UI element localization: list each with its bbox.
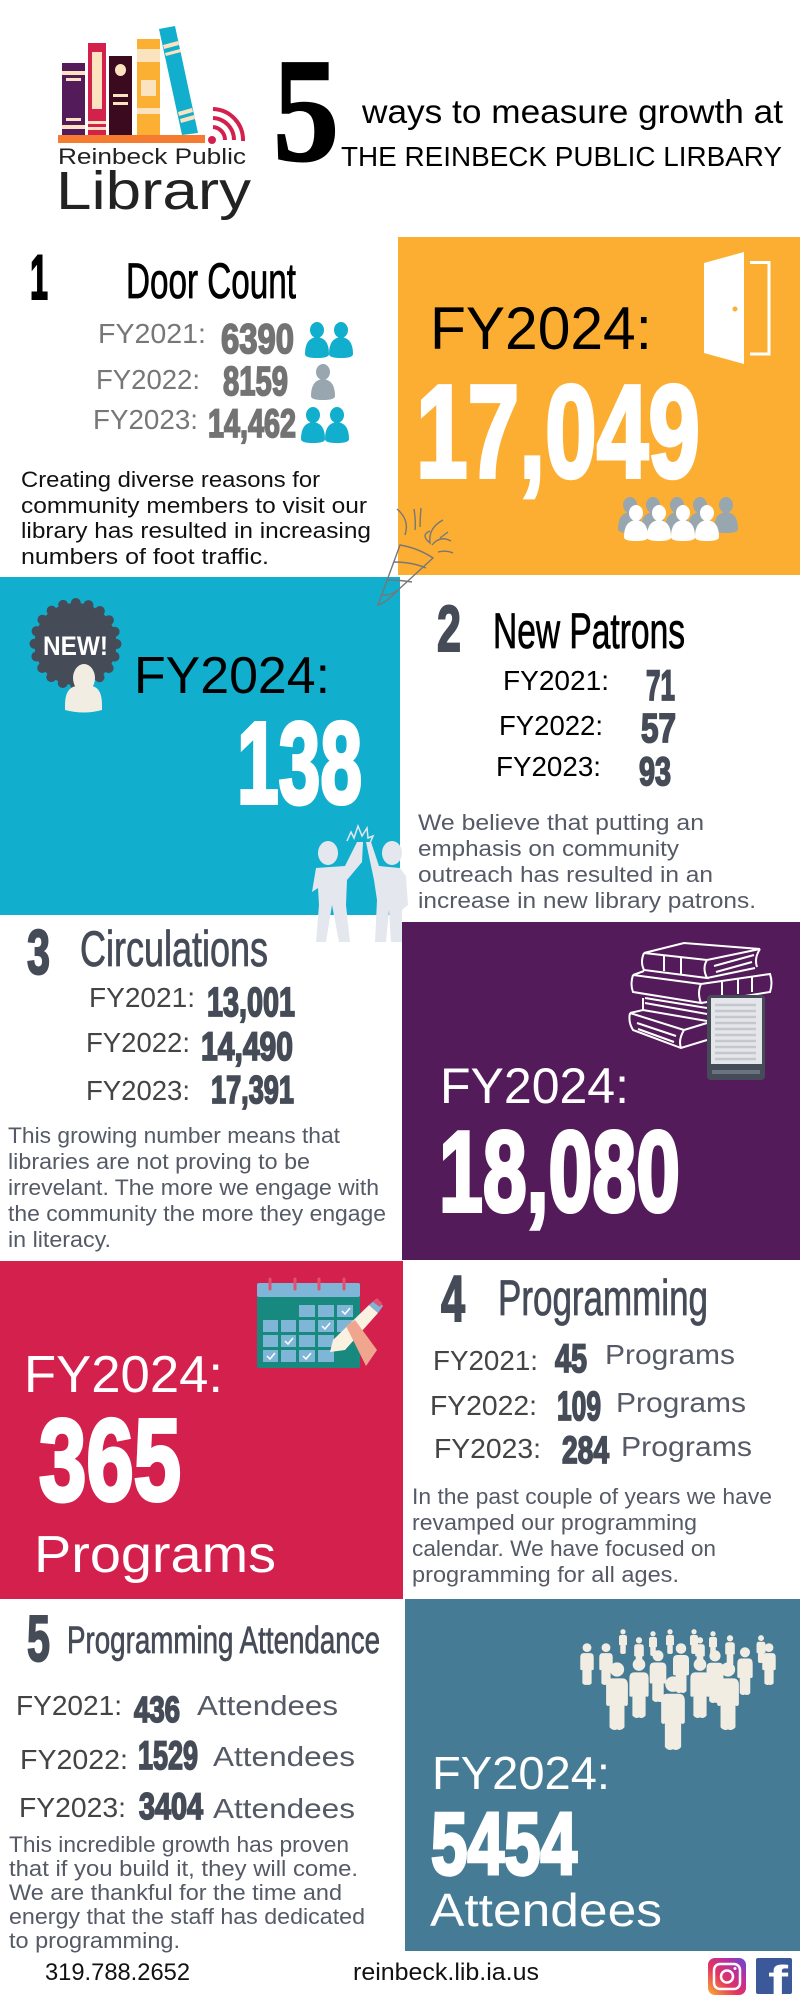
yearly figures: FY2023: — [86, 1075, 190, 1106]
icon: new badge — [34, 603, 116, 712]
yearly figures: FY2021: — [503, 665, 609, 696]
title: 5 — [273, 29, 339, 193]
yearly figures: 109 — [557, 1383, 601, 1429]
text block: This incredible growth has proven — [9, 1832, 349, 1857]
text block: the community the more they engage — [8, 1201, 386, 1226]
heading: Programming Attendance — [67, 1620, 380, 1662]
heading: Door Count — [126, 253, 296, 309]
icon: people — [301, 322, 353, 443]
yearly figures: 17,391 — [211, 1069, 294, 1112]
panel: 4 programming — [412, 1262, 772, 1587]
text block: Creating diverse reasons for — [21, 467, 320, 492]
yearly figures: FY2021: — [98, 318, 206, 349]
icon: calendar — [257, 1279, 383, 1368]
footer contact: 319.788.2652 — [45, 1959, 190, 1986]
heading: Programming — [498, 1270, 708, 1326]
footer contact: reinbeck.lib.ia.us — [353, 1959, 539, 1986]
yearly figures: Programs — [616, 1387, 746, 1418]
yearly figures: Attendees — [197, 1690, 338, 1721]
heading: 1 — [30, 243, 48, 313]
heading: 4 — [441, 1262, 465, 1335]
text block: We are thankful for the time and — [9, 1880, 342, 1905]
yearly figures: 6390 — [221, 315, 294, 362]
heading — [27, 918, 268, 988]
footer contact — [45, 1959, 539, 1986]
yearly figures: 1529 — [138, 1734, 198, 1778]
panel: FY2024 new patrons: FY2024: — [134, 647, 330, 705]
heading — [437, 592, 685, 665]
yearly figures: FY2022: — [20, 1744, 128, 1775]
yearly figures: FY2021: — [89, 982, 195, 1013]
text block: emphasis on community — [418, 836, 679, 861]
header logo — [56, 26, 251, 221]
yearly figures: 3404 — [139, 1786, 203, 1827]
yearly figures: 14,490 — [201, 1025, 293, 1069]
yearly figures: FY2021: — [433, 1345, 538, 1376]
text block — [418, 810, 756, 913]
text block: that if you build it, they will come. — [9, 1856, 358, 1881]
icon: instagram — [708, 1958, 746, 1995]
text block: revamped our programming — [412, 1510, 697, 1535]
panel: FY2024 attendance: FY2024: — [432, 1747, 610, 1799]
text block — [21, 467, 371, 569]
yearly figures — [86, 979, 295, 1112]
yearly figures: FY2022: — [96, 364, 200, 395]
yearly figures — [16, 1689, 355, 1827]
yearly figures: 45 — [555, 1337, 587, 1381]
yearly figures — [430, 1337, 752, 1472]
yearly figures: 71 — [646, 662, 675, 710]
text block: to programming. — [9, 1928, 180, 1953]
yearly figures: FY2023: — [434, 1433, 541, 1464]
yearly figures: FY2023: — [19, 1792, 126, 1823]
icon: new badge: NEW! — [43, 631, 108, 661]
heading — [27, 1602, 380, 1675]
text block — [9, 1832, 365, 1953]
heading — [30, 243, 296, 313]
text block: in literacy. — [8, 1227, 111, 1252]
panel: FY2024 door count — [398, 237, 800, 575]
text block: energy that the staff has dedicated — [9, 1904, 365, 1929]
yearly figures: FY2023: — [93, 404, 198, 435]
yearly figures: 57 — [641, 705, 676, 751]
title — [273, 29, 783, 193]
text block: increase in new library patrons. — [418, 888, 756, 913]
text block: outreach has resulted in an — [418, 862, 713, 887]
text block: community members to visit our — [21, 493, 367, 518]
icon: facebook — [756, 1957, 792, 2000]
yearly figures: 13,001 — [207, 979, 295, 1025]
text block: programming for all ages. — [412, 1562, 679, 1587]
logo text — [56, 144, 251, 221]
yearly figures: FY2023: — [496, 751, 601, 782]
heading — [441, 1262, 708, 1335]
icon: confetti popper — [378, 508, 453, 605]
yearly figures: Attendees — [213, 1793, 355, 1824]
yearly figures — [93, 315, 296, 446]
heading: 5 — [27, 1602, 50, 1675]
panel: 2 new patrons — [418, 592, 756, 913]
yearly figures: 93 — [639, 750, 671, 794]
yearly figures: 436 — [134, 1689, 180, 1730]
text block: library has resulted in increasing — [21, 518, 371, 543]
text block: In the past couple of years we have — [412, 1484, 772, 1509]
heading: 3 — [27, 918, 50, 988]
icon: books and e-reader — [629, 943, 772, 1080]
yearly figures: FY2022: — [499, 710, 603, 741]
panel: FY2024 circulations: FY2024: — [440, 1058, 629, 1114]
panel: 1 door count — [21, 243, 371, 569]
text block: numbers of foot traffic. — [21, 544, 269, 569]
logo text: Library — [56, 161, 251, 221]
text block: We believe that putting an — [418, 810, 704, 835]
panel: FY2024 attendance: 5454 — [431, 1794, 577, 1893]
panel: FY2024 programming — [0, 1261, 403, 1599]
text block — [412, 1484, 772, 1587]
yearly figures — [496, 662, 676, 794]
yearly figures: FY2022: — [430, 1390, 537, 1421]
title: ways to measure growth at — [361, 93, 783, 130]
yearly figures: FY2022: — [86, 1027, 190, 1058]
text block: calendar. We have focused on — [412, 1536, 716, 1561]
text block: libraries are not proving to be — [8, 1149, 310, 1174]
panel: FY2024 door count: FY2024: — [430, 295, 652, 362]
heading: Circulations — [80, 921, 268, 977]
yearly figures: Programs — [605, 1339, 735, 1370]
panel: FY2024 programming: 365 — [39, 1395, 181, 1525]
title: THE REINBECK PUBLIC LIRBARY — [341, 141, 782, 172]
yearly figures: Programs — [621, 1431, 752, 1462]
icon: wifi signal — [208, 109, 243, 144]
heading: 2 — [437, 592, 461, 665]
logo text: Reinbeck Public — [58, 144, 246, 169]
panel: FY2024 programming: Programs — [34, 1526, 276, 1584]
icon: crowd — [618, 497, 738, 541]
panel: FY2024 new patrons: 138 — [237, 698, 362, 828]
panel: 3 circulations — [8, 918, 386, 1252]
text block: This growing number means that — [8, 1123, 340, 1148]
yearly figures: 284 — [562, 1430, 609, 1472]
panel: 5 programming attendance — [9, 1602, 380, 1953]
text block — [8, 1123, 386, 1252]
panel: FY2024 programming: FY2024: — [24, 1346, 223, 1404]
yearly figures: 14,462 — [208, 402, 296, 446]
panel: FY2024 new patrons — [0, 577, 408, 942]
panel: FY2024 attendance: Attendees — [430, 1884, 662, 1936]
panel: FY2024 circulations — [402, 922, 800, 1260]
icon: crowd of people — [580, 1629, 776, 1750]
yearly figures: FY2021: — [16, 1690, 122, 1721]
panel: FY2024 attendance — [405, 1599, 800, 1951]
yearly figures: 8159 — [223, 358, 288, 404]
icon: stack of books — [58, 26, 205, 143]
icon: high five — [312, 826, 408, 942]
panel: FY2024 circulations: 18,080 — [439, 1109, 680, 1236]
heading: New Patrons — [493, 603, 685, 659]
yearly figures: Attendees — [213, 1741, 355, 1772]
text block: irrevelant. The more we engage with — [8, 1175, 379, 1200]
icon: open door — [704, 252, 769, 364]
